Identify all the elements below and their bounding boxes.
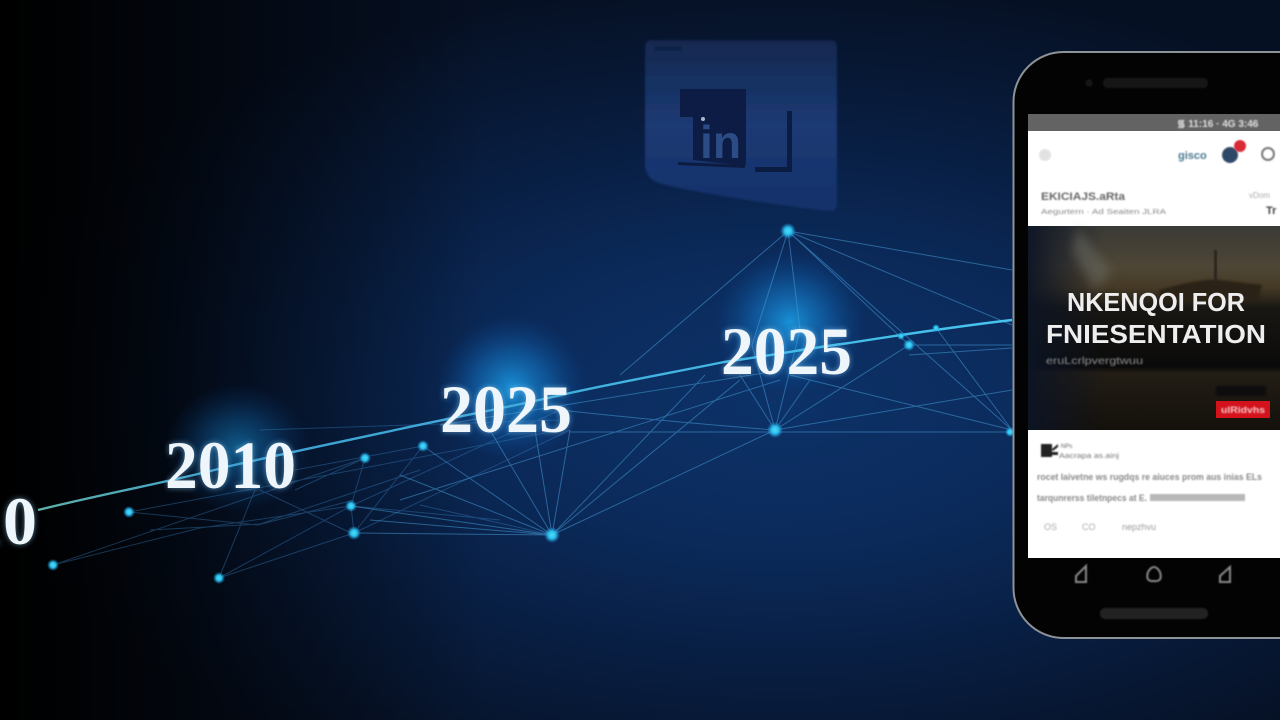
status bar: ᯾ 11:16 · 4G 3:46	[1177, 119, 1259, 130]
app header: EKICIAJS.aRta	[1041, 191, 1126, 203]
timeline line	[38, 320, 1012, 510]
hero red button: ulRidvhs	[1221, 405, 1265, 415]
post card: ·NPs	[1059, 444, 1072, 450]
icon letters: in	[700, 116, 741, 168]
phone	[1014, 52, 1280, 638]
icon: LinkedIn badge	[645, 40, 837, 211]
hero image: FNIESENTATION	[1046, 319, 1266, 349]
glow halos behind years	[166, 250, 866, 512]
network nodes	[47, 223, 1015, 584]
post card: Aacrapa as.ainj	[1059, 453, 1120, 460]
app header: gisco	[1178, 150, 1207, 162]
hero sponsor tag	[1216, 386, 1266, 396]
post card: OS	[1044, 522, 1057, 532]
app header: vDom	[1249, 191, 1270, 200]
status bar	[1028, 114, 1280, 131]
year label: 2010: 2010	[165, 427, 296, 503]
post card	[1028, 430, 1280, 558]
hero headline: NKENQOI FOR	[1067, 287, 1245, 317]
phone body	[1014, 52, 1280, 638]
hero subtext: eruLcrlpvergtwuu	[1046, 356, 1143, 367]
year label: 2025 right: 2025	[721, 313, 852, 389]
year label: 2025 middle: 2025	[440, 371, 572, 447]
app header	[1028, 131, 1280, 226]
home bar	[1100, 608, 1208, 619]
earpiece	[1086, 78, 1208, 88]
nav icons	[1076, 566, 1230, 582]
post card: tarqunrerss tiletnpecs at E.	[1037, 493, 1147, 503]
hero red button	[1216, 401, 1270, 418]
network lines: right section	[351, 231, 1012, 535]
post card: rocet laivetne ws rugdqs re aiuces prom aus inias ELs	[1037, 472, 1262, 482]
post card: nepzhvu	[1122, 522, 1156, 532]
app header: Aegurtern · Ad Seaiten JLRA	[1041, 209, 1166, 216]
post card: CO	[1082, 522, 1096, 532]
hero image	[1028, 226, 1280, 430]
app header: Tr	[1266, 205, 1277, 217]
network lines: left section	[53, 410, 570, 578]
